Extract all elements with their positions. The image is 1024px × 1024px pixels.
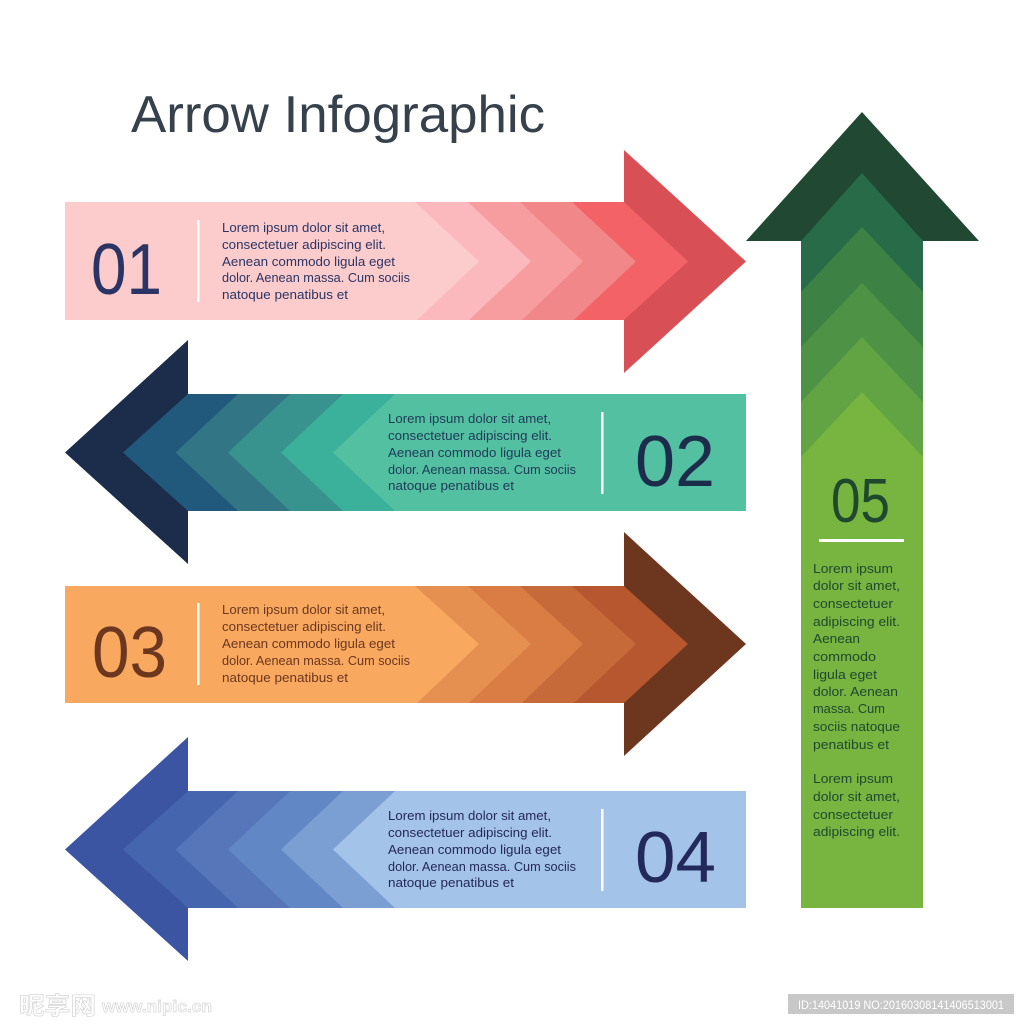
text block 05: Lorem ipsum: [813, 561, 893, 576]
text block 03: [222, 603, 410, 685]
watermark: [19, 993, 212, 1020]
text block 05: sociis natoque: [813, 719, 900, 734]
watermark: www.nipic.cn: [101, 997, 212, 1016]
text block 01: dolor. Aenean massa. Cum sociis: [222, 271, 410, 285]
arrow 03: orange, pointing right: [65, 532, 746, 756]
text block 05: dolor sit amet,: [813, 578, 900, 593]
id badge: ID:14041019 NO:20160308141406513001: [798, 998, 1004, 1012]
arrow 01: red, pointing right: [65, 150, 746, 373]
arrow 02: teal, pointing left: [65, 340, 746, 564]
text block 05: dolor sit amet,: [813, 789, 900, 804]
id badge: [788, 994, 1014, 1014]
divider: [601, 412, 604, 494]
text block 04: consectetuer adipiscing elit.: [388, 826, 552, 840]
text block 04: dolor. Aenean massa. Cum sociis: [388, 860, 576, 874]
text block 04: Lorem ipsum dolor sit amet,: [388, 809, 551, 823]
text block 03: Lorem ipsum dolor sit amet,: [222, 603, 385, 617]
text block 02: consectetuer adipiscing elit.: [388, 429, 552, 443]
text block 02: Lorem ipsum dolor sit amet,: [388, 412, 551, 426]
arrow 04: blue, pointing left: [65, 737, 746, 961]
text block 05: dolor. Aenean: [813, 684, 898, 699]
text block 05: adipiscing elit.: [813, 614, 900, 629]
divider: [819, 539, 904, 542]
text block 03: natoque penatibus et: [222, 671, 349, 685]
text block 01: [222, 221, 410, 302]
text block 04: [388, 809, 576, 890]
text block 05: massa. Cum: [813, 701, 885, 716]
text block 01: Lorem ipsum dolor sit amet,: [222, 221, 385, 235]
text block 05: Aenean: [813, 631, 860, 646]
text block 01: natoque penatibus et: [222, 288, 349, 302]
number 02: 02: [635, 422, 715, 502]
text block 02: Aenean commodo ligula eget: [388, 446, 562, 460]
text block 01: Aenean commodo ligula eget: [222, 255, 396, 269]
text block 02: [388, 412, 576, 493]
title: Arrow Infographic: [131, 86, 545, 144]
number 05: 05: [831, 467, 890, 536]
text block 05: adipiscing elit.: [813, 824, 900, 839]
text block 03: Aenean commodo ligula eget: [222, 637, 396, 651]
number 03: 03: [92, 613, 167, 693]
text block 03: consectetuer adipiscing elit.: [222, 620, 386, 634]
text block 05: consectetuer: [813, 807, 894, 822]
text block 04: natoque penatibus et: [388, 876, 515, 890]
text block 03: dolor. Aenean massa. Cum sociis: [222, 654, 410, 668]
watermark: 昵享网: [19, 993, 96, 1020]
divider: [197, 603, 200, 685]
text block 02: dolor. Aenean massa. Cum sociis: [388, 463, 576, 477]
number 01: 01: [91, 230, 162, 310]
number 04: 04: [635, 818, 716, 898]
divider: [197, 220, 200, 302]
text block 05: Lorem ipsum: [813, 771, 893, 786]
text block 05: commodo: [813, 649, 876, 664]
text block 01: consectetuer adipiscing elit.: [222, 238, 386, 252]
text block 05: penatibus et: [813, 737, 889, 752]
arrow 05: green, pointing up: [746, 112, 979, 908]
text block 02: natoque penatibus et: [388, 479, 515, 493]
text block 05: ligula eget: [813, 667, 877, 682]
text block 05: consectetuer: [813, 596, 894, 611]
text block 04: Aenean commodo ligula eget: [388, 843, 562, 857]
text block 05: [813, 561, 900, 839]
divider: [601, 809, 604, 891]
